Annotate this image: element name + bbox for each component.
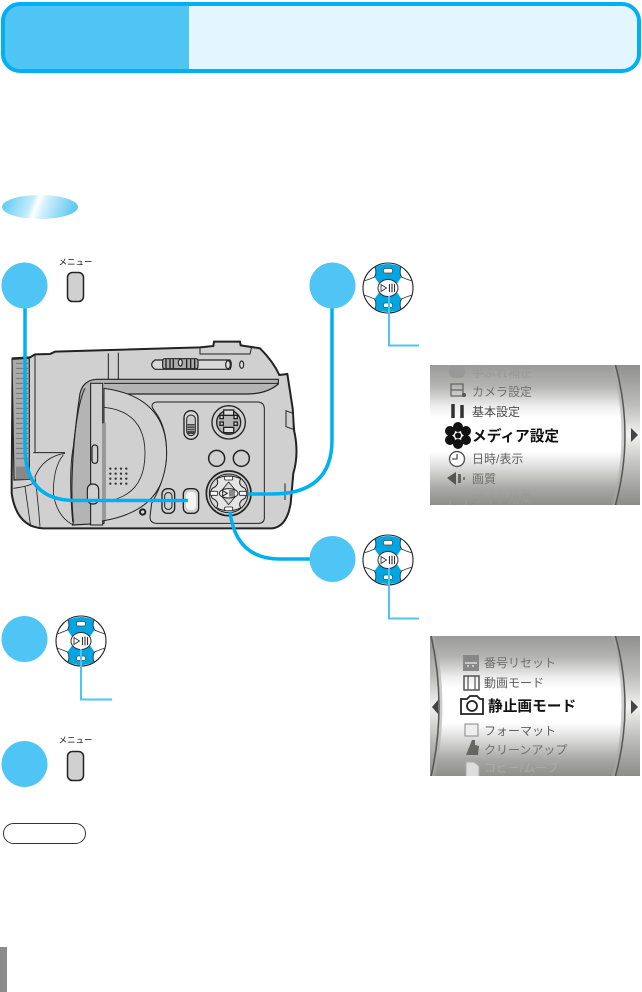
small lens dot [140,509,145,515]
grip lines [33,347,252,453]
leader line: step 2 [389,296,419,346]
camcorder body [12,342,297,528]
menu screen: still image mode: 静止画モード [488,697,576,715]
top slide switch [152,359,244,369]
menu screen: media settings: 画質 [472,471,496,486]
step 2 circle [310,262,356,308]
menu screen: media settings: 日時/表示 [472,452,523,466]
menu button: step 5: メニュー [58,735,93,745]
step 1 circle [2,262,48,308]
header banner [0,0,639,75]
menu screen: media settings: 手ぶれ補正 [472,366,532,380]
connector line: step 3 to dial [230,512,312,559]
joystick [212,406,245,439]
menu button: step 1 [58,257,93,302]
menu screen: media settings: ワイド効果 [472,492,532,506]
dial icon: step 4 [56,616,106,666]
menu screen: still image mode: 動画モード [484,676,544,690]
menu button: step 5 [58,735,93,780]
menu screen: media settings: カメラ設定 [472,385,532,399]
leader line: step 3 [389,568,419,618]
connector line: step 1 to menu button [25,300,188,500]
step 5 circle [2,741,48,787]
LCD door [72,379,278,525]
connector line: step 2 to dial [248,300,332,494]
note label pill [4,824,86,844]
camera dial [206,471,251,516]
camcorder illustration [12,342,297,528]
menu screen: media settings [430,360,642,510]
control panel [150,402,264,523]
section pill [2,195,78,219]
page tab [0,947,7,992]
menu screen: still image mode: コピー/ムーブ [484,760,559,775]
step 3 circle [310,536,356,582]
round buttons [209,450,249,466]
menu screen: still image mode: クリーンアップ [484,743,567,757]
dial icon: step 3 [363,535,413,585]
menu screen: media settings: メディア設定 [472,427,559,445]
mode switch [184,411,198,439]
menu screen: still image mode: フォーマット [484,724,556,738]
menu icons [461,655,483,778]
dial icon: step 2 [363,263,413,313]
menu icons [445,365,471,506]
slot buttons [162,489,199,513]
speaker grille [109,467,127,485]
step 4 circle [2,616,48,662]
menu screen: still image mode: 番号リセット [484,656,556,670]
lens ring [12,358,29,480]
menu screen: media settings: 基本設定 [472,405,520,419]
leader line: step 4 [81,649,112,700]
menu screen: still image mode [425,631,642,781]
menu button: step 1: メニュー [58,257,93,267]
